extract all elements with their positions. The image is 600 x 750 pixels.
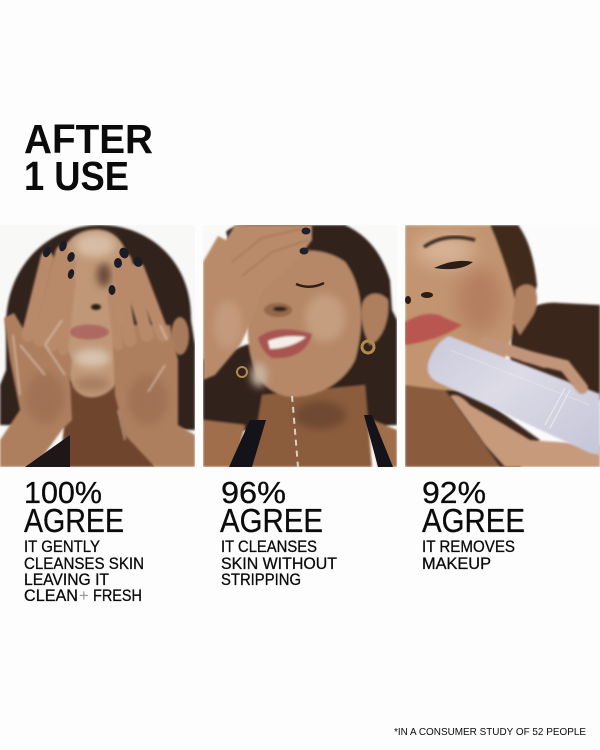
cheek shading (415, 234, 502, 332)
upper fingers (486, 343, 582, 388)
stat 3 (422, 475, 525, 573)
stat 2 (220, 475, 337, 589)
left hand (0, 252, 72, 467)
lower hand (450, 395, 600, 467)
black top (25, 435, 70, 467)
lips (405, 314, 462, 345)
nails (300, 228, 310, 254)
stat 3: AGREE (422, 502, 525, 539)
nails (42, 240, 144, 295)
stat 1: FRESH (93, 587, 142, 605)
photo 2: woman with hand on forehead, water running down (203, 225, 397, 467)
title: AFTER (24, 116, 153, 162)
hand over forehead (203, 225, 312, 380)
bottle rings (450, 350, 590, 428)
stat 3: MAKEUP (422, 555, 491, 573)
face highlights (251, 294, 346, 429)
ear (171, 317, 189, 355)
stat 2: AGREE (220, 502, 323, 539)
title (24, 116, 153, 199)
title: 1 USE (24, 153, 129, 199)
stat 2: IT CLEANSES (221, 538, 317, 556)
water streaks (13, 320, 167, 440)
stat 1: AGREE (24, 502, 124, 539)
stat 1: + (79, 587, 89, 605)
nostrils (405, 292, 433, 304)
stat 1: LEAVING IT (24, 571, 109, 589)
stat 2: 96% (221, 475, 286, 510)
bottle (428, 336, 600, 455)
wrist highlight (214, 301, 242, 349)
stat 1: CLEAN (24, 587, 78, 605)
palm tones (25, 372, 168, 426)
stat 2: STRIPPING (221, 571, 301, 589)
eyebrow (424, 237, 475, 247)
closed eye (296, 283, 324, 287)
stat 1: IT GENTLY (24, 538, 100, 556)
photo 1: woman washing face with both hands (0, 225, 195, 467)
stat 1: 100% (24, 475, 102, 510)
earring (362, 341, 374, 353)
stat 1 (24, 475, 144, 605)
stat 3: 92% (422, 475, 486, 510)
stat 3: IT REMOVES (422, 538, 515, 556)
footnote: *IN A CONSUMER STUDY OF 52 PEOPLE (394, 726, 586, 738)
eye (434, 261, 473, 269)
black straps (229, 420, 266, 467)
stat 1: CLEANSES SKIN (24, 555, 144, 573)
nose (91, 304, 101, 310)
right hand (112, 260, 195, 467)
water stream (292, 396, 298, 467)
mouth (258, 329, 312, 358)
photo 3: woman holding bottle at chin (405, 225, 600, 467)
lips (69, 324, 109, 340)
forehead and chin highlights (74, 233, 115, 391)
nose (264, 303, 292, 317)
stat 2: SKIN WITHOUT (221, 555, 337, 573)
